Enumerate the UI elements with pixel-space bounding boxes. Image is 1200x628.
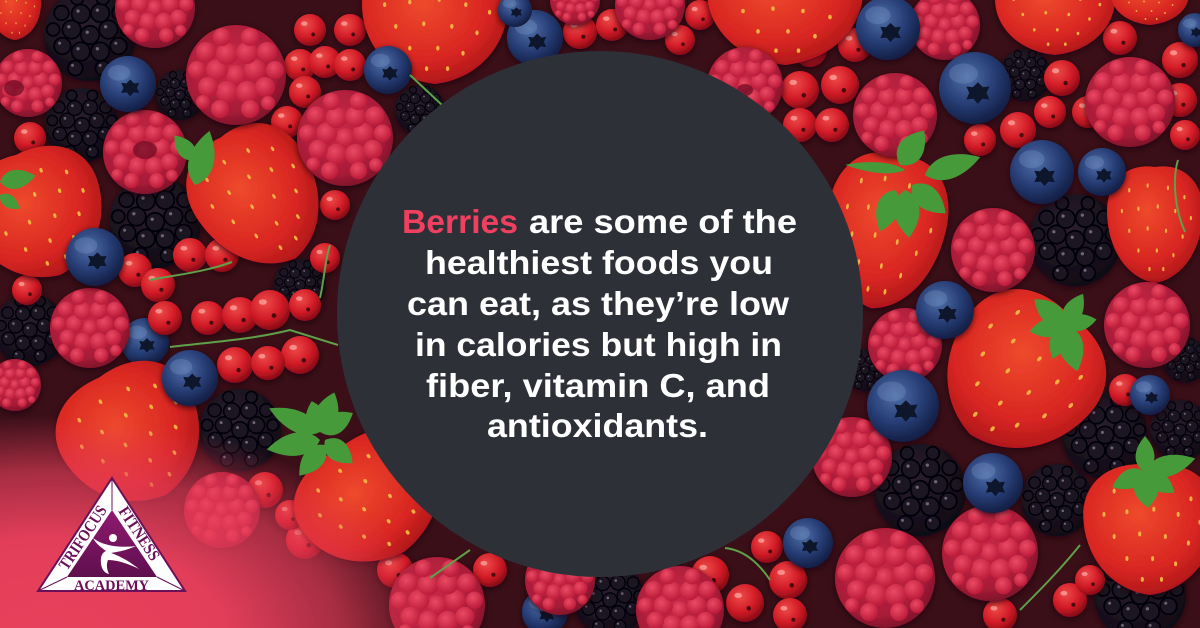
line 5: fiber, vitamin C, and bbox=[426, 367, 770, 404]
line 2: healthiest foods you bbox=[425, 244, 773, 281]
statement text bbox=[402, 203, 797, 444]
logo triangle bbox=[38, 478, 185, 591]
line 1: are some of the bbox=[529, 203, 797, 240]
pink fade corner bbox=[0, 380, 445, 628]
line 6: antioxidants. bbox=[487, 407, 708, 444]
logo: Trifocus Fitness Academy bbox=[38, 478, 185, 594]
dark circle panel bbox=[337, 51, 863, 577]
raspberry hollows bbox=[4, 80, 753, 159]
line 4: in calories but high in bbox=[415, 326, 782, 363]
logo text: FITNESS: FITNESS bbox=[115, 503, 164, 564]
logo inner panel bbox=[67, 510, 157, 577]
logo text: TRIFOCUS: TRIFOCUS bbox=[54, 502, 111, 573]
line 3: can eat, as they’re low bbox=[407, 285, 789, 322]
highlighted word: Berries: Berries bbox=[402, 203, 518, 240]
logo text: ACADEMY: ACADEMY bbox=[74, 578, 150, 594]
logo figure bbox=[93, 534, 139, 574]
